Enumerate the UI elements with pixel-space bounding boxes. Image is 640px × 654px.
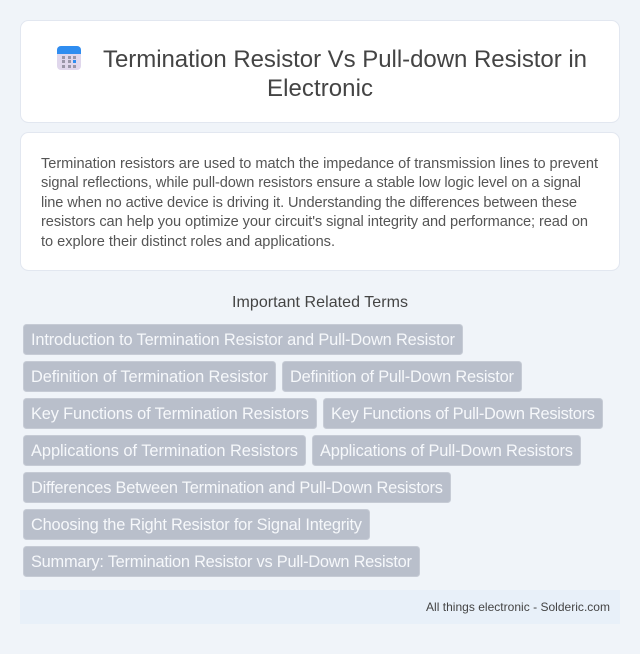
tag: applications of termination resistors: Applications of Termination Resistors — [31, 442, 298, 460]
tag: definition of termination resistor — [24, 362, 276, 392]
text block: intro paragraph: line when no active device is driving it. Understanding the differences between these — [41, 195, 577, 211]
title — [103, 46, 587, 102]
icon: calendar — [57, 46, 81, 70]
tag: key functions of pull-down resistors — [324, 398, 602, 428]
tag: key functions of termination resistors: Key Functions of Termination Resistors — [31, 405, 309, 423]
tag: differences — [24, 472, 450, 502]
tag: summary: Summary: Termination Resistor vs Pull-Down Resistor — [31, 553, 413, 571]
text block: intro paragraph — [41, 156, 598, 250]
tag: applications of pull-down resistors — [312, 436, 580, 466]
tag: key functions of pull-down resistors: Key Functions of Pull-Down Resistors — [331, 405, 595, 423]
panel: related term tags — [24, 324, 602, 576]
tag: introduction: Introduction to Termination Resistor and Pull-Down Resistor — [31, 331, 456, 349]
title: Electronic — [267, 75, 373, 102]
text block: intro paragraph: resistors can help you optimize your circuit's signal integrity and performance; read on — [41, 214, 588, 230]
footer: All things electronic - Solderic.com — [426, 600, 610, 614]
heading: important related terms: Important Related Terms — [232, 294, 408, 311]
tag: applications of termination resistors — [24, 436, 306, 466]
text block: intro paragraph: to explore their distinct roles and applications. — [41, 234, 335, 250]
tag: definition of termination resistor: Definition of Termination Resistor — [31, 368, 269, 386]
title: Termination Resistor Vs Pull-down Resistor in — [103, 46, 587, 73]
footer — [20, 590, 620, 624]
tag: definition of pull-down resistor — [282, 362, 522, 392]
panel: intro paragraph card — [20, 132, 620, 270]
tag: summary — [24, 546, 420, 576]
tag: key functions of termination resistors — [24, 398, 316, 428]
tag: introduction — [24, 324, 462, 354]
tag: definition of pull-down resistor: Definition of Pull-Down Resistor — [290, 368, 515, 386]
tag: differences: Differences Between Termination and Pull-Down Resistors — [31, 479, 443, 497]
tag: choosing the right resistor: Choosing the Right Resistor for Signal Integrity — [31, 516, 363, 534]
tag: choosing the right resistor — [24, 510, 370, 540]
text block: intro paragraph: Termination resistors are used to match the impedance of transmission lines to prevent — [41, 156, 598, 172]
panel: title card — [20, 20, 620, 122]
text block: intro paragraph: signal reflections, while pull-down resistors ensure a stable low logic level on a signal — [41, 175, 581, 191]
tag: applications of pull-down resistors: Applications of Pull-Down Resistors — [320, 442, 573, 460]
